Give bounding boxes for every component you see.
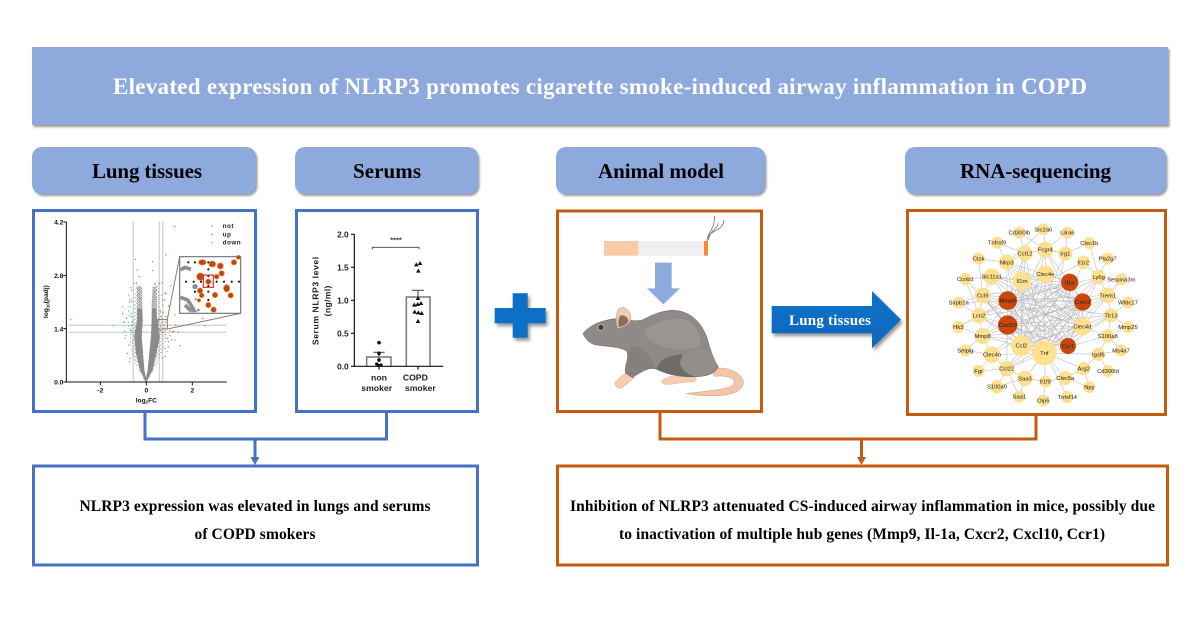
network nodes: Tnfrsf9 bbox=[988, 241, 1006, 247]
network nodes: Clec4n bbox=[983, 353, 1001, 359]
heading: Serums bbox=[295, 147, 478, 194]
network nodes: Wfdc17 bbox=[1118, 301, 1138, 307]
network nodes: Tnf bbox=[1040, 351, 1049, 357]
network nodes: Slc2a6 bbox=[1034, 227, 1052, 233]
connector: orange bracket to conclusion bbox=[660, 412, 1036, 465]
network nodes: Il1f9 bbox=[1040, 380, 1051, 386]
axis labels: smoker bbox=[405, 383, 436, 393]
axis labels: 1.5 bbox=[337, 262, 349, 272]
axis labels: 10 bbox=[45, 303, 50, 308]
network edges bbox=[958, 229, 1128, 401]
axis labels: smoker bbox=[361, 383, 393, 393]
axis labels: COPD bbox=[403, 372, 428, 382]
network nodes: Il1rn bbox=[1016, 279, 1028, 285]
legend: down bbox=[223, 240, 241, 247]
network nodes: Lcn2 bbox=[973, 314, 985, 320]
conclusion box: mice hub genes: to inactivation of multiple hub genes (Mmp9, Il-1a, Cxcr2, Cxcl10, Ccr1) bbox=[619, 526, 1105, 543]
arrow: exposure down bbox=[647, 263, 680, 304]
axis labels: 2.0 bbox=[337, 229, 349, 239]
conclusion box: COPD smokers: NLRP3 expression was elevated in lungs and serums bbox=[80, 498, 430, 515]
axis labels: 1.4 bbox=[54, 326, 64, 333]
panel: lung tissues volcano plot bbox=[34, 210, 256, 412]
title banner: Elevated expression of NLRP3 promotes cigarette smoke-induced airway inflammation in COPD bbox=[113, 74, 1087, 99]
network nodes: Ccr1 bbox=[1062, 344, 1074, 350]
heading: Lung tissues: Lung tissues bbox=[92, 159, 202, 183]
network nodes: Irg1 bbox=[1060, 252, 1070, 258]
network nodes: S100a8 bbox=[1098, 334, 1118, 340]
network nodes: Clec4e bbox=[1036, 272, 1054, 278]
legend: up bbox=[223, 231, 231, 238]
heading: Animal model bbox=[556, 147, 765, 194]
COPD smoker points bbox=[412, 261, 424, 323]
network nodes: Ctsk bbox=[973, 257, 985, 263]
network nodes: Mmp25 bbox=[1118, 325, 1138, 331]
error bars bbox=[373, 290, 424, 357]
network nodes: Mmp9 bbox=[1000, 299, 1016, 305]
axis labels: 2.8 bbox=[54, 273, 64, 280]
axis labels: 2 bbox=[146, 400, 149, 405]
network nodes: Arg2 bbox=[1078, 367, 1090, 373]
conclusion box: mice hub genes bbox=[558, 466, 1168, 565]
panel: animal model bbox=[558, 211, 762, 412]
axes bbox=[351, 234, 443, 370]
network nodes: Ms4a7 bbox=[1112, 348, 1130, 354]
axis labels: -2 bbox=[97, 387, 104, 394]
icon: cigarette bbox=[604, 216, 724, 256]
axis labels: non bbox=[371, 372, 387, 382]
axis labels: FC bbox=[148, 397, 157, 404]
network nodes: Fcgr4 bbox=[1038, 248, 1054, 254]
heading: RNA-sequencing: RNA-sequencing bbox=[960, 159, 1112, 183]
volcano point cloud bbox=[125, 259, 180, 383]
network nodes: Cxcr2 bbox=[1075, 300, 1090, 306]
significance bracket bbox=[372, 236, 419, 249]
axis labels: 0.5 bbox=[337, 328, 349, 338]
panel: serums bar chart bbox=[296, 210, 478, 412]
network nodes: Ccl2 bbox=[1015, 344, 1027, 350]
inset: magnified points bbox=[180, 255, 241, 313]
network nodes: Clec1b bbox=[1080, 241, 1098, 247]
haunch highlight bbox=[645, 319, 700, 349]
axis labels: 0.0 bbox=[54, 379, 64, 386]
axis labels: 2 bbox=[190, 387, 194, 394]
network nodes: Ccl12 bbox=[1018, 251, 1032, 257]
legend bbox=[211, 223, 241, 247]
heading: RNA-sequencing bbox=[905, 147, 1166, 194]
axis labels: Serum NLRP3 level bbox=[310, 257, 320, 345]
hind foot bbox=[662, 376, 696, 384]
threshold lines bbox=[68, 222, 226, 382]
network nodes: Lilra6 bbox=[1060, 231, 1074, 237]
front paw bbox=[615, 372, 634, 388]
up-regulated points bbox=[158, 226, 205, 332]
axis labels: 1.0 bbox=[337, 295, 349, 305]
belly shading bbox=[657, 354, 695, 377]
axes bbox=[63, 222, 227, 385]
network nodes: Fgr bbox=[974, 369, 983, 375]
conclusion box: COPD smokers: of COPD smokers bbox=[194, 526, 316, 543]
network nodes: Cxcl10 bbox=[999, 323, 1017, 329]
network nodes: Serpina3m bbox=[1107, 277, 1136, 283]
arrow: lung tissues bbox=[772, 291, 901, 348]
body bbox=[583, 310, 718, 378]
neck shading bbox=[625, 346, 657, 378]
heading: Serums: Serums bbox=[353, 159, 421, 183]
network nodes: Hk3 bbox=[953, 325, 964, 331]
network nodes: Oip5 bbox=[1037, 399, 1049, 405]
network nodes: Mmp8 bbox=[975, 334, 991, 340]
axis labels: (ng/ml) bbox=[322, 286, 332, 316]
conclusion box: COPD smokers bbox=[34, 466, 478, 565]
network nodes: Saa3 bbox=[1018, 376, 1032, 382]
network nodes bbox=[949, 223, 1138, 407]
network nodes: Cd300lb bbox=[1008, 231, 1030, 237]
network nodes: Npy bbox=[1084, 385, 1095, 391]
down-regulated points bbox=[71, 288, 132, 331]
network nodes: Pla2g7 bbox=[1099, 257, 1117, 263]
significance bracket: **** bbox=[390, 236, 402, 245]
network nodes: Ccl22 bbox=[999, 367, 1014, 373]
arrow: lung tissues: Lung tissues bbox=[789, 313, 871, 329]
network nodes: Il1r2 bbox=[1078, 260, 1089, 266]
network nodes: Trem1 bbox=[1099, 293, 1116, 299]
tail bbox=[686, 368, 743, 396]
network nodes: Igsf6 bbox=[1092, 352, 1105, 358]
non smoker points bbox=[375, 341, 383, 367]
axis labels: 0.0 bbox=[337, 361, 349, 371]
network nodes: Sirpb1a bbox=[949, 301, 969, 307]
heading: Lung tissues bbox=[32, 147, 256, 194]
ear bbox=[616, 307, 631, 328]
title banner bbox=[32, 47, 1168, 125]
axis labels: log bbox=[136, 397, 146, 404]
network nodes: Tlr13 bbox=[1104, 313, 1118, 319]
network nodes: Tnfsf14 bbox=[1058, 395, 1078, 401]
legend: not bbox=[223, 223, 234, 230]
axis labels bbox=[310, 229, 436, 393]
eye bbox=[598, 324, 604, 330]
connector: blue bracket to conclusion bbox=[145, 412, 386, 465]
network nodes: Il1a bbox=[1065, 280, 1075, 286]
conclusion box: mice hub genes: Inhibition of NLRP3 attenuated CS-induced airway inflammation in mice, possibly due bbox=[570, 498, 1155, 515]
network nodes: Ccnb1 bbox=[957, 277, 974, 283]
heading: Animal model: Animal model bbox=[598, 159, 724, 183]
network nodes: Slc11a1 bbox=[981, 275, 1002, 281]
axis labels: 4.2 bbox=[54, 219, 64, 226]
axis labels: (padj) bbox=[43, 285, 50, 303]
axis labels: 0 bbox=[144, 387, 148, 394]
icon: plus sign bbox=[495, 293, 546, 338]
network nodes: Clec5a bbox=[1056, 376, 1075, 382]
network nodes: Ccl9 bbox=[977, 293, 989, 299]
network nodes: Nlrp3 bbox=[1000, 260, 1014, 266]
panel: RNA-sequencing network bbox=[908, 210, 1166, 414]
bars bbox=[367, 297, 430, 366]
zoom box and connector lines bbox=[158, 257, 241, 329]
network nodes: Ly6g bbox=[1092, 275, 1105, 281]
network nodes: Clec4d bbox=[1073, 325, 1091, 331]
network nodes: Saa1 bbox=[1013, 395, 1026, 401]
icon: mouse bbox=[583, 307, 743, 396]
axis labels bbox=[43, 219, 194, 405]
network nodes: Selplg bbox=[957, 348, 973, 354]
network nodes: S100a9 bbox=[987, 385, 1007, 391]
axis labels: log bbox=[43, 308, 50, 318]
network nodes: Cd300ld bbox=[1097, 369, 1119, 375]
